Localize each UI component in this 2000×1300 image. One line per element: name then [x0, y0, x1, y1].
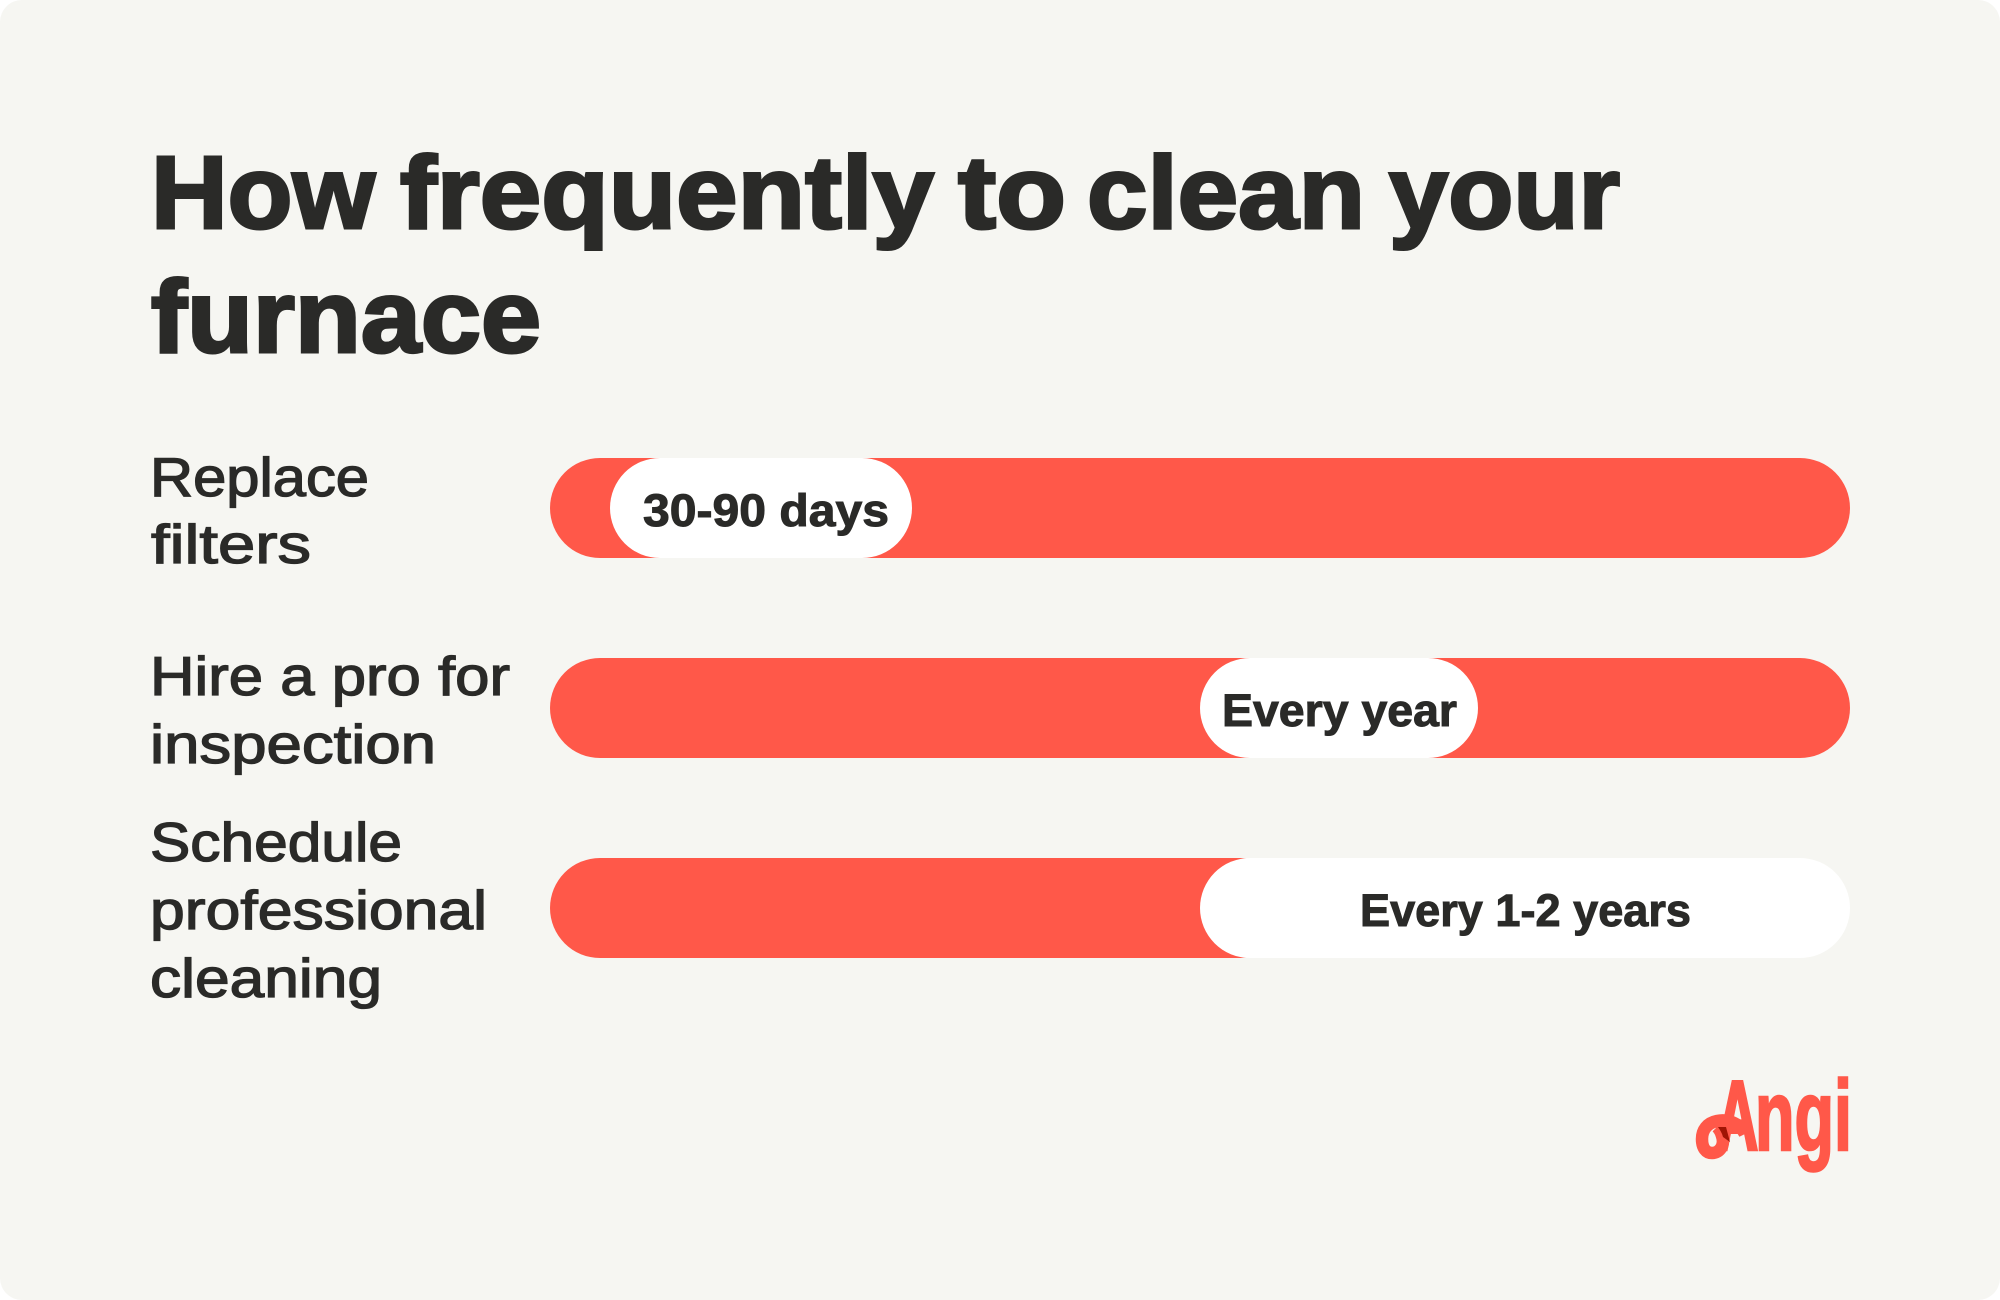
pill: 30-90 days — [610, 458, 912, 558]
pill: every year: Every year — [1222, 685, 1457, 736]
pill: 30-90 days: 30-90 days — [643, 485, 889, 536]
label: hire a pro for inspection — [150, 645, 510, 775]
title: frequently — [400, 135, 934, 250]
row: hire a pro for inspection — [150, 645, 1850, 775]
label: hire a pro for inspection: Hire a pro for — [150, 645, 510, 707]
title: your — [1389, 135, 1620, 250]
label: replace filters — [150, 446, 369, 575]
title — [151, 135, 1620, 374]
row: schedule professional cleaning — [150, 811, 1850, 1009]
label: replace filters: filters — [151, 513, 311, 575]
title: clean — [1087, 135, 1365, 250]
label: schedule professional cleaning — [150, 811, 487, 1009]
row: replace filters — [150, 446, 1850, 575]
label: schedule professional cleaning: Schedule — [150, 811, 402, 873]
label: hire a pro for inspection: inspection — [150, 713, 436, 775]
logo: Angi: ngi — [1755, 1060, 1852, 1172]
label: schedule professional cleaning: professional — [150, 879, 487, 941]
pill: every year — [1200, 658, 1478, 758]
title: furnace — [151, 259, 541, 374]
label: replace filters: Replace — [150, 446, 369, 508]
label: schedule professional cleaning: cleaning — [150, 947, 382, 1009]
pill: every 1-2 years: Every 1-2 years — [1360, 885, 1691, 936]
title: to — [958, 135, 1066, 250]
title: How — [151, 135, 376, 250]
bar: hire a pro for inspection — [550, 658, 1850, 758]
bar: schedule professional cleaning — [550, 858, 1290, 958]
logo: Angi: A — [1717, 1061, 1758, 1170]
bar: replace filters — [550, 458, 1850, 558]
logo: Angi — [1702, 1060, 1852, 1172]
pill: every 1-2 years — [1200, 858, 1850, 958]
